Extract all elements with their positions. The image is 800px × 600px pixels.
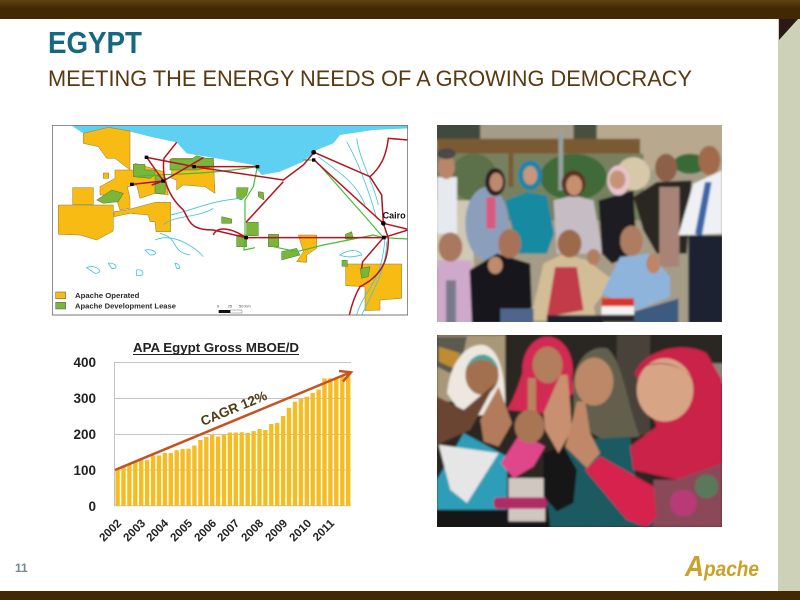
photo: group of colleagues gesturing (437, 125, 722, 322)
x axis year labels (98, 517, 338, 544)
x axis year labels: 2005 (169, 517, 196, 544)
front row (437, 260, 474, 324)
scale bar: 50 Km (239, 303, 251, 308)
subtitle: MEETING THE ENERGY NEEDS OF A GROWING DEMOCRACY (48, 66, 692, 91)
x axis year labels: 2009 (264, 518, 290, 544)
y axis labels: 400 (73, 355, 96, 370)
woman 3 (573, 348, 640, 440)
panel: production bar chart (73, 340, 354, 544)
x axis year labels: 2007 (216, 518, 242, 544)
legend: Apache Operated (75, 293, 139, 300)
water features (87, 138, 387, 315)
woman 4 (630, 347, 722, 480)
Apache operated blocks (58, 127, 402, 311)
CAGR label: CAGR 12% (198, 388, 269, 429)
x axis year labels: 2004 (145, 517, 172, 544)
x axis year labels: 2011 (311, 517, 338, 544)
y axis labels: 200 (73, 427, 96, 442)
gridlines (114, 362, 351, 506)
x axis year labels: 2003 (122, 518, 148, 544)
legend: Apache Development Lease (75, 303, 176, 310)
corner fold (779, 19, 798, 40)
oil pipelines red (132, 138, 408, 315)
y axis labels: 300 (73, 391, 96, 406)
pink sleeve and hand (585, 456, 657, 527)
x axis year labels: 2002 (98, 518, 124, 544)
y axis labels (73, 355, 96, 514)
flag (601, 298, 634, 306)
trend arrow (115, 371, 351, 470)
y axis labels: 100 (73, 463, 96, 478)
right side strip (778, 19, 800, 591)
y axis labels: 0 (88, 499, 96, 514)
x axis year labels: 2010 (288, 518, 314, 544)
legend (56, 292, 176, 310)
scale bar: 25 (228, 303, 233, 308)
title: EGYPT (48, 25, 142, 60)
quarterly bars (115, 373, 350, 506)
hands (437, 383, 495, 445)
top band (0, 0, 800, 19)
x axis year labels: 2008 (240, 517, 267, 544)
panel: map of Apache operations in Egypt (52, 125, 408, 316)
terminal nodes (130, 150, 386, 239)
Apache development leases (97, 156, 370, 278)
x axis year labels: 2006 (193, 518, 219, 544)
sea (71, 125, 408, 175)
scale bar: 0 (217, 303, 220, 308)
chart title: APA Egypt Gross MBOE/D (133, 340, 299, 355)
bottom band (0, 591, 800, 600)
page number: 11 (15, 561, 28, 575)
woman 2 (522, 337, 573, 403)
gas pipelines green (137, 160, 408, 252)
back row (437, 177, 457, 234)
woman 1 (447, 345, 505, 417)
photo: women showing inked fingers (437, 335, 722, 527)
scale bar (217, 303, 251, 313)
label: Cairo: Cairo (383, 211, 406, 221)
